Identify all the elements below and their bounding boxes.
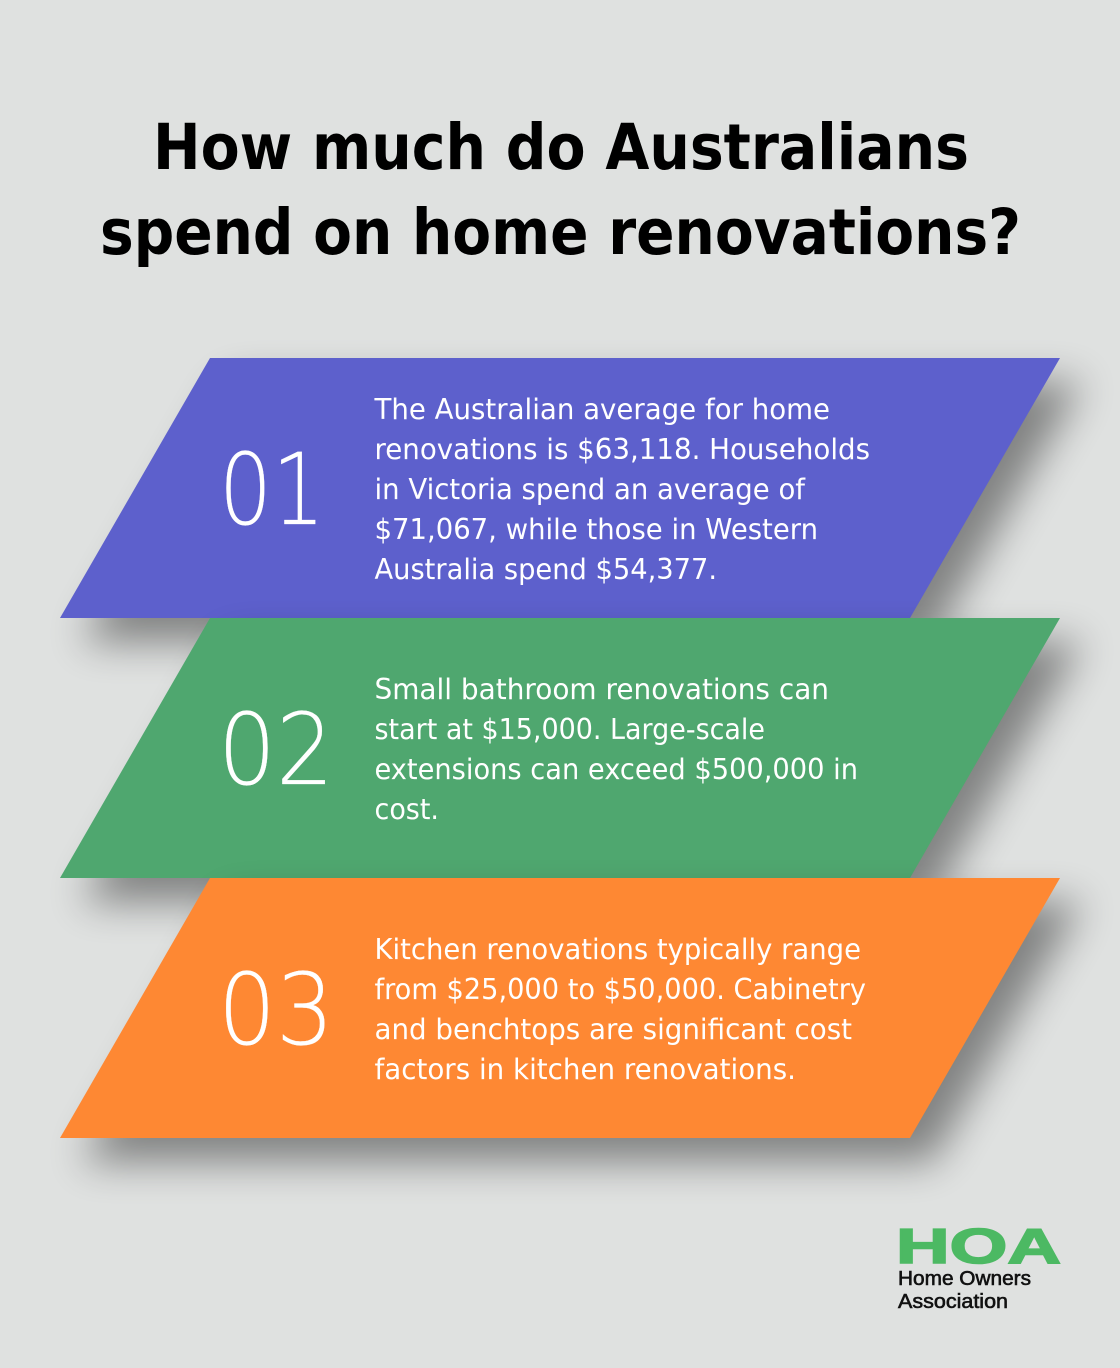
title: spend on home renovations? (100, 196, 1021, 269)
step 02 text: start at $15,000. Large-scale (374, 713, 765, 746)
step 01 text (374, 393, 870, 586)
title: How much do Australians (153, 111, 969, 184)
logo: HOA Home Owners Association: Home Owners (898, 1268, 1031, 1290)
panel: step 03 (60, 878, 1082, 1162)
step 03 text: and benchtops are significant cost (374, 1013, 852, 1046)
step 01 text: $71,067, while those in Western (374, 513, 818, 546)
step number 01: 01 (219, 433, 325, 548)
logo: HOA Home Owners Association: Association (898, 1291, 1008, 1313)
step 01 text: Australia spend $54,377. (374, 553, 717, 586)
step 01 text: renovations is $63,118. Households (374, 433, 870, 466)
step 02 text: Small bathroom renovations can (374, 673, 829, 706)
step number 02: 02 (218, 693, 334, 808)
panel: step 01 (60, 358, 1082, 642)
panel: step 02 (60, 618, 1082, 902)
logo: HOA Home Owners Association (896, 1220, 1061, 1313)
step number 03: 03 (218, 953, 334, 1068)
step 02 text: extensions can exceed $500,000 in (374, 753, 858, 786)
step 01 text: in Victoria spend an average of (374, 473, 806, 506)
step 01 text: The Australian average for home (374, 393, 830, 426)
step 03 text: Kitchen renovations typically range (374, 933, 861, 966)
step 02 text (374, 673, 858, 826)
title (100, 111, 1021, 269)
step 03 text (374, 933, 866, 1086)
step 03 text: from $25,000 to $50,000. Cabinetry (374, 973, 866, 1006)
step 03 text: factors in kitchen renovations. (374, 1053, 796, 1086)
logo: HOA Home Owners Association: HOA (896, 1220, 1061, 1274)
step 02 text: cost. (374, 793, 439, 826)
